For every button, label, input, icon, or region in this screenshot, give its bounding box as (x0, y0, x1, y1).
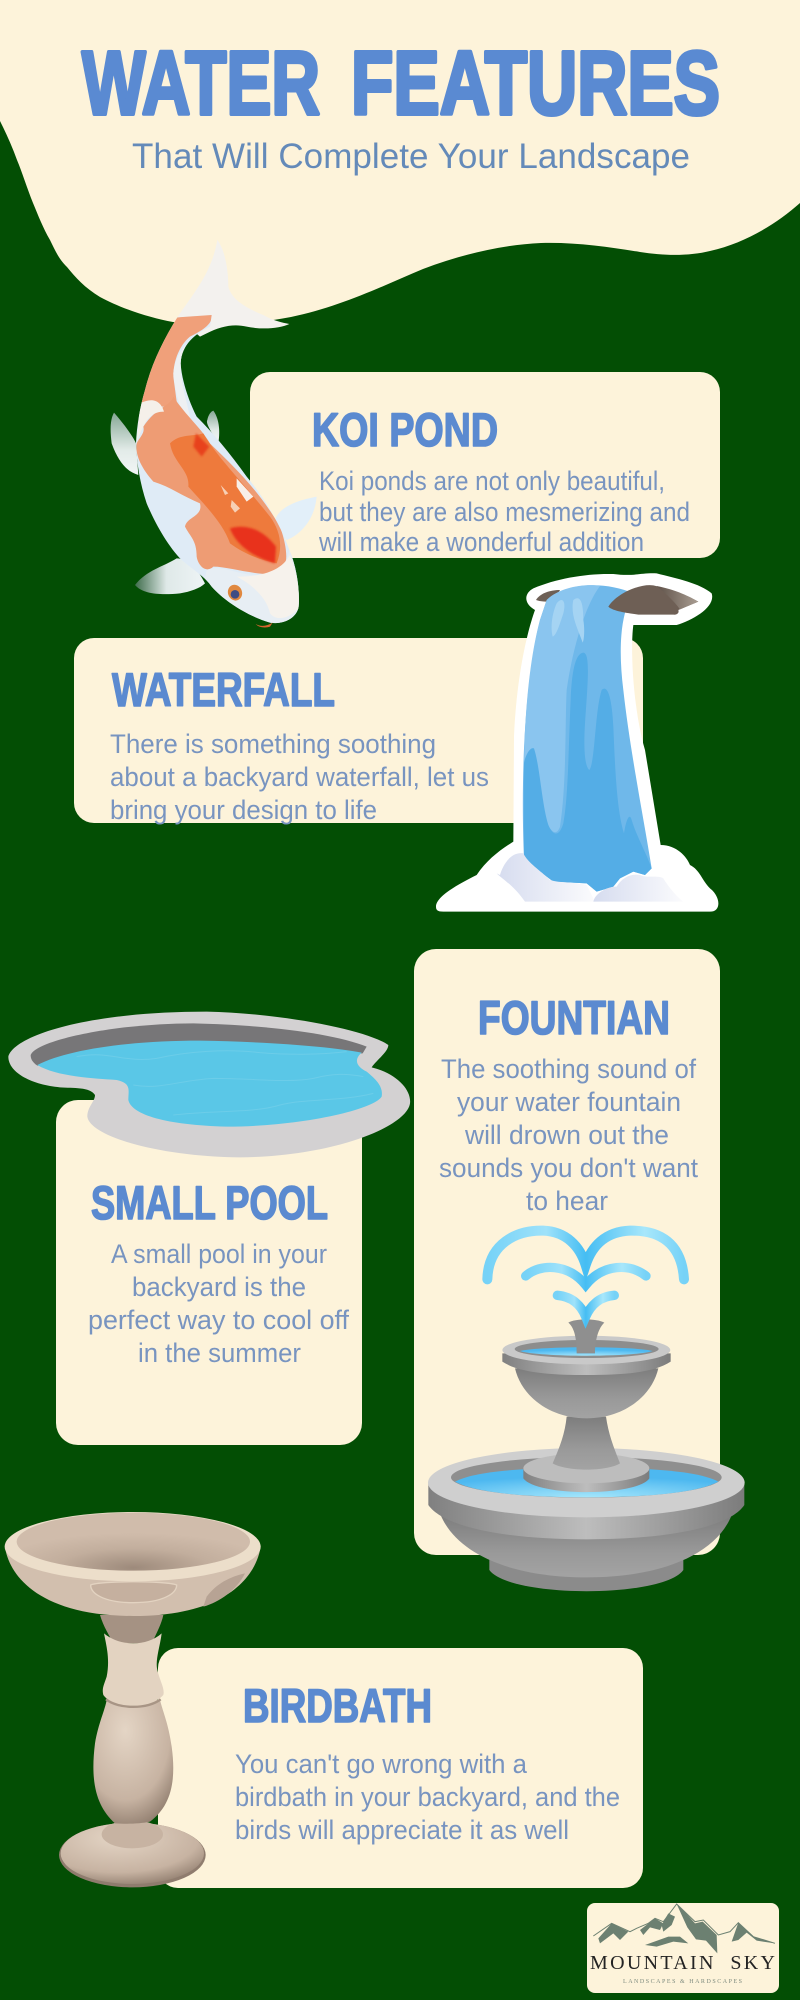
text: koi pond description (318, 466, 690, 557)
text: koi pond description: will make a wonderful addition (318, 527, 644, 557)
icon: fountain (428, 1231, 745, 1591)
heading: small pool: SMALL POOL (91, 1176, 328, 1229)
text: small pool description: in the summer (138, 1338, 301, 1368)
text: fountain description: sounds you don't want (439, 1153, 698, 1183)
text: koi pond description: Koi ponds are not only beautiful, (319, 466, 665, 496)
text: small pool description: backyard is the (132, 1272, 306, 1302)
icon: waterfall (436, 573, 718, 912)
text: waterfall description: There is something soothing (110, 729, 436, 759)
logo tagline: LANDSCAPES & HARDSCAPES (623, 1979, 742, 1985)
panel: waterfall (74, 638, 643, 825)
text: birdbath description (235, 1749, 620, 1845)
text: waterfall description: about a backyard waterfall, let us (110, 762, 489, 792)
text: fountain description: to hear (526, 1186, 608, 1216)
heading: fountain: FOUNTIAN (478, 991, 670, 1044)
panel: birdbath (158, 1648, 643, 1888)
icon: koi fish (111, 240, 317, 630)
heading: birdbath: BIRDBATH (243, 1679, 432, 1732)
text: koi pond description: but they are also mesmerizing and (319, 497, 690, 527)
panel: small pool (56, 1100, 362, 1445)
logo: mountain sky (587, 1903, 779, 1993)
text: fountain description: The soothing sound of (441, 1054, 696, 1084)
logo wordmark: MOUNTAIN SKY (590, 1952, 775, 1974)
text: birdbath description: You can't go wrong with a (235, 1749, 528, 1779)
text: waterfall description (110, 729, 489, 825)
title (82, 34, 720, 134)
subtitle: That Will Complete Your Landscape (132, 137, 690, 176)
panel: koi pond (250, 372, 720, 558)
text: small pool description: perfect way to cool off (88, 1305, 349, 1335)
text: birdbath description: birdbath in your backyard, and the (235, 1782, 620, 1812)
text: fountain description: your water fountain (457, 1087, 681, 1117)
text: birdbath description: birds will appreciate it as well (235, 1815, 569, 1845)
heading: koi pond: KOI POND (312, 403, 498, 456)
text: waterfall description: bring your design to life (110, 795, 377, 825)
icon: pool (8, 1012, 410, 1157)
title: WATER (82, 34, 320, 134)
text: small pool description: A small pool in your (111, 1239, 327, 1269)
icon: birdbath (5, 1512, 261, 1887)
text: fountain description: will drown out the (464, 1120, 669, 1150)
text: small pool description (88, 1239, 349, 1368)
heading: waterfall: WATERFALL (112, 663, 335, 716)
header wave shape (0, 0, 800, 325)
text: fountain description (439, 1054, 698, 1216)
panel: fountain (414, 949, 720, 1555)
icon: mountains (593, 1904, 775, 1953)
